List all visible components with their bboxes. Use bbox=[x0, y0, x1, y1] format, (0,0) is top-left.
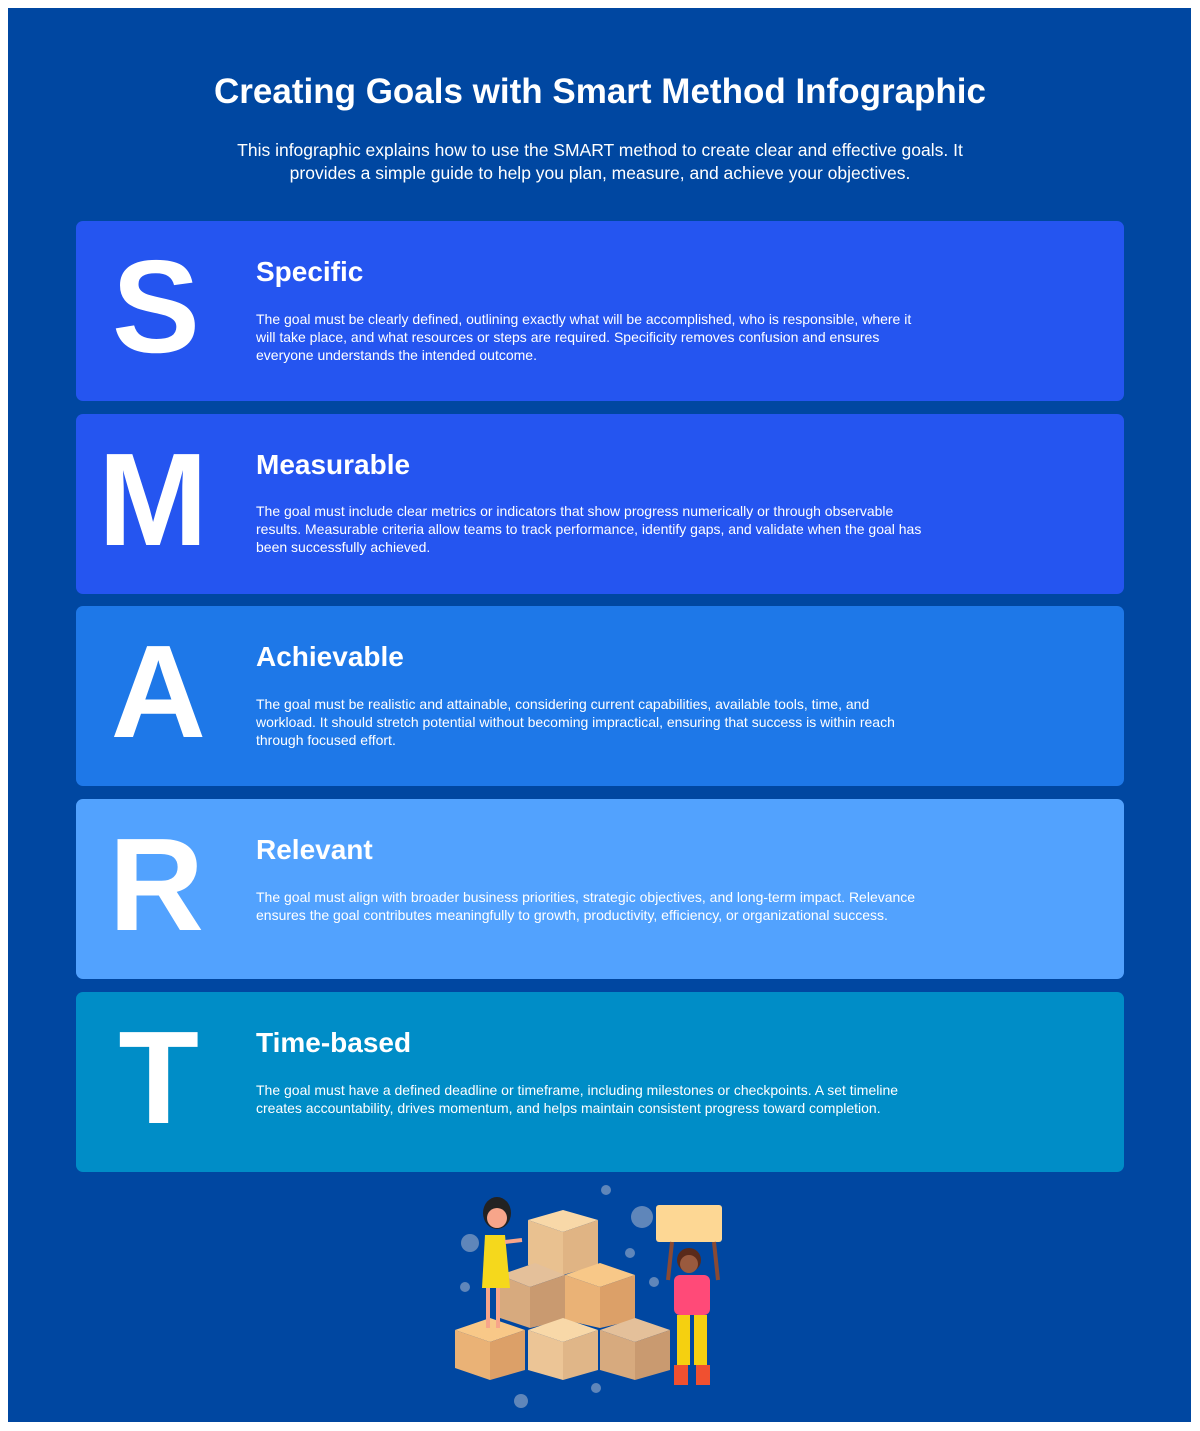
title: Creating Goals with Smart Method Infographic bbox=[214, 72, 986, 111]
woman with sign bbox=[656, 1205, 722, 1385]
panel: specific: S bbox=[112, 233, 200, 380]
panel: relevant: Relevant bbox=[256, 834, 373, 865]
panel: measurable: Measurable bbox=[256, 449, 410, 480]
panel: measurable: M bbox=[98, 426, 208, 573]
woman in yellow bbox=[482, 1197, 522, 1328]
panel: time-based: T bbox=[118, 1004, 199, 1151]
panel: specific: Specific bbox=[256, 256, 363, 287]
panel: achievable bbox=[76, 606, 1124, 786]
panel: time-based: The goal must have a defined deadline or timeframe, including milestones or checkpoints. A set timeline creates accountability, drives momentum, and helps maintain consistent progress toward completion. bbox=[256, 1082, 898, 1116]
panel: measurable: The goal must include clear metrics or indicators that show progress numerically or through observable results. Measurable criteria allow teams to track performance, identify gaps, and validate when the goal has been successfully achieved. bbox=[256, 503, 921, 555]
subtitle: This infographic explains how to use the SMART method to create clear and effective goals. It provides a simple guide to help you plan, measure, and achieve your objectives. bbox=[237, 140, 963, 183]
panel: time-based: Time-based bbox=[256, 1027, 411, 1058]
panel: measurable bbox=[76, 414, 1124, 594]
panel: achievable: The goal must be realistic and attainable, considering current capabilities, available tools, time, and workload. It should stretch potential without becoming impractical, ensuring that success is within reach through focused effort. bbox=[256, 696, 895, 748]
panel: achievable: Achievable bbox=[256, 641, 404, 672]
panel: specific bbox=[76, 221, 1124, 401]
panel: achievable: A bbox=[111, 618, 206, 765]
illustration: people with boxes bbox=[455, 1185, 722, 1408]
panel: relevant bbox=[76, 799, 1124, 979]
panel: relevant: R bbox=[109, 811, 204, 958]
panel: specific: The goal must be clearly defined, outlining exactly what will be accomplished, who is responsible, where it will take place, and what resources or steps are required. Specificity removes confusion and ensures everyone understands the intended outcome. bbox=[256, 311, 911, 363]
cubes bbox=[455, 1210, 670, 1380]
panel: relevant: The goal must align with broader business priorities, strategic objectives, and long-term impact. Relevance ensures the goal contributes meaningfully to growth, productivity, efficiency, or organizational success. bbox=[256, 889, 915, 923]
panel: time-based bbox=[76, 992, 1124, 1172]
